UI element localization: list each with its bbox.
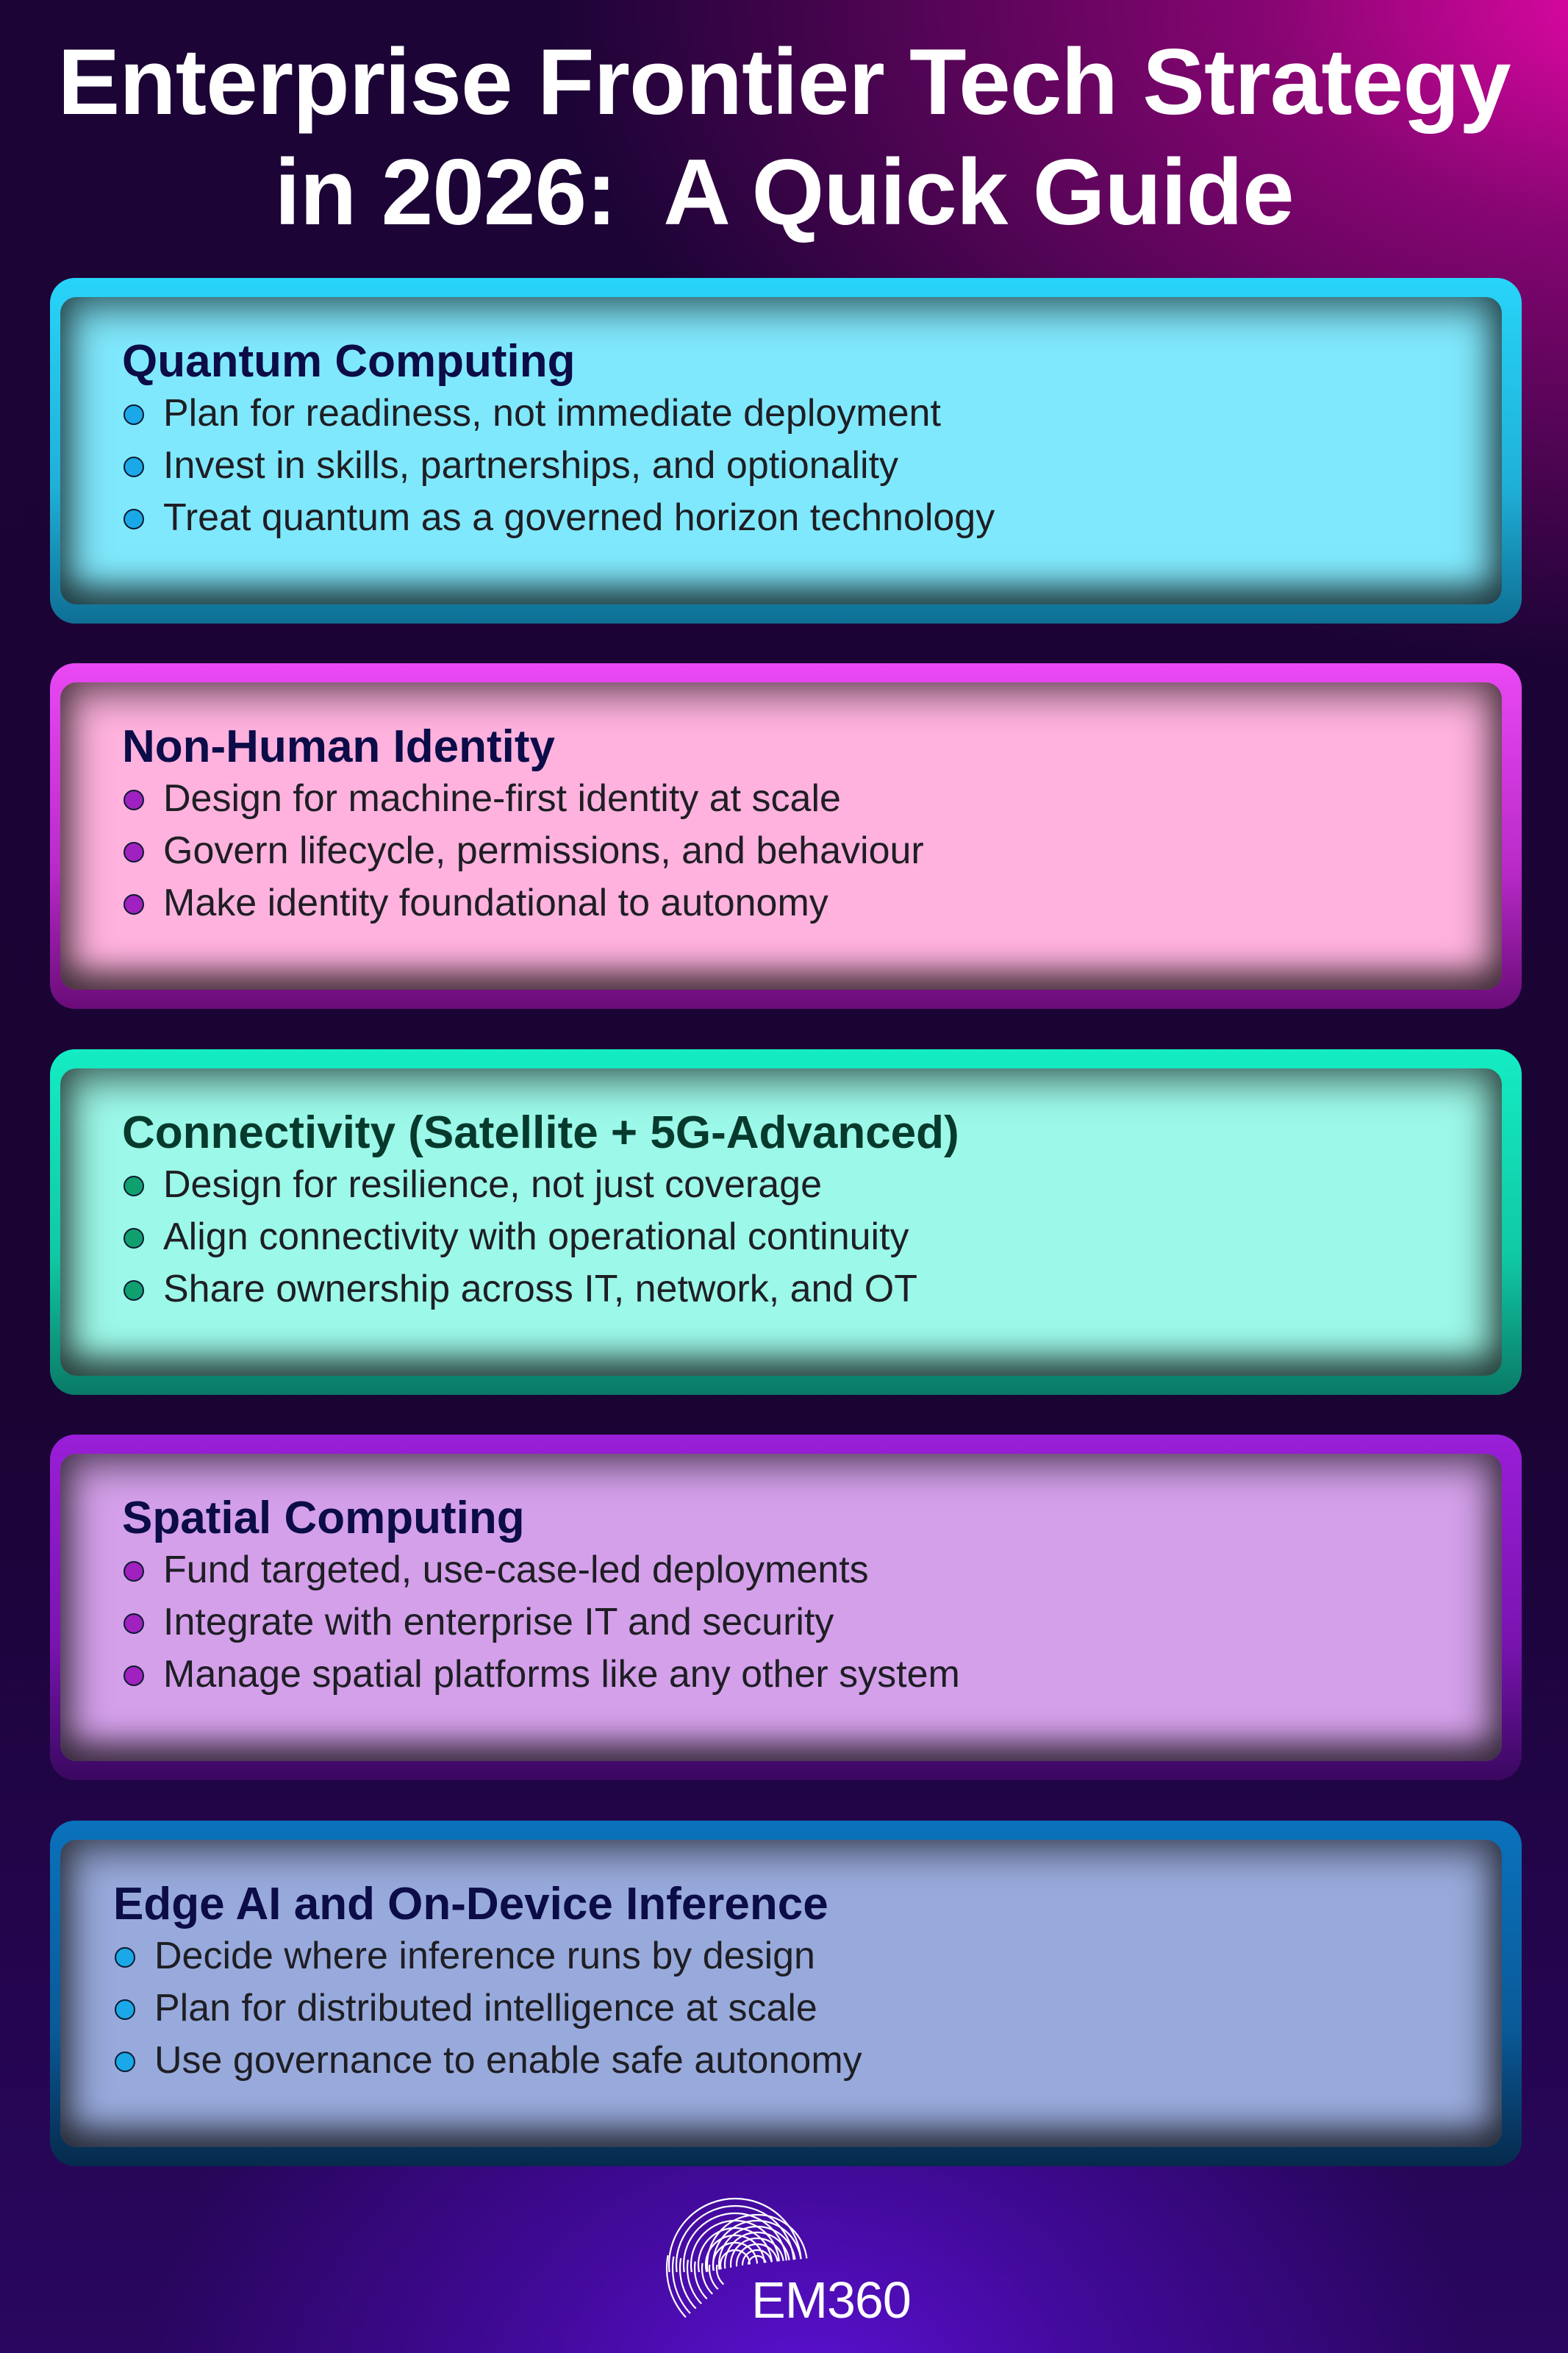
text: EM360: EM360 xyxy=(751,2271,911,2329)
heading: nhi: Non-Human Identity xyxy=(122,721,555,772)
bullet 3: Use governance to enable safe autonomy xyxy=(154,2039,862,2082)
panel: quantum computing xyxy=(50,278,1522,624)
bullet 1: Plan for readiness, not immediate deployment xyxy=(163,392,941,435)
bullet 1: Fund targeted, use-case-led deployments xyxy=(163,1549,869,1591)
bullet 1: Decide where inference runs by design xyxy=(154,1935,815,1977)
panel: edge ai xyxy=(50,1821,1522,2166)
bullet 3: Treat quantum as a governed horizon technology xyxy=(163,496,995,539)
icon: logo mark xyxy=(666,2197,807,2318)
title: in 2026: A Quick Guide xyxy=(274,140,1294,244)
bullet 3: Share ownership across IT, network, and OT xyxy=(163,1268,917,1310)
title xyxy=(57,29,1511,244)
bullet 3: Manage spatial platforms like any other system xyxy=(163,1653,960,1696)
bullet 1: Design for resilience, not just coverage xyxy=(163,1163,822,1206)
heading: edge ai: Edge AI and On-Device Inference xyxy=(113,1879,828,1929)
heading: spatial: Spatial Computing xyxy=(122,1493,525,1543)
panel: spatial computing xyxy=(50,1435,1522,1780)
title: Enterprise Frontier Tech Strategy xyxy=(57,29,1510,134)
heading: quantum: Quantum Computing xyxy=(122,336,575,387)
heading: connectivity: Connectivity (Satellite + 5G-Advanced) xyxy=(122,1107,959,1158)
logo: EM360 xyxy=(666,2197,911,2329)
panel: non-human identity xyxy=(50,663,1522,1009)
bullet 2: Integrate with enterprise IT and security xyxy=(163,1601,834,1643)
bullet 2: Align connectivity with operational continuity xyxy=(163,1215,909,1258)
bullet 2: Plan for distributed intelligence at scale xyxy=(154,1987,817,2029)
bullet 2: Govern lifecycle, permissions, and behaviour xyxy=(163,829,924,872)
bullet 3: Make identity foundational to autonomy xyxy=(163,882,828,924)
bullet 1: Design for machine-first identity at scale xyxy=(163,777,841,820)
panel: connectivity xyxy=(50,1049,1522,1395)
bullet 2: Invest in skills, partnerships, and optionality xyxy=(163,444,898,487)
